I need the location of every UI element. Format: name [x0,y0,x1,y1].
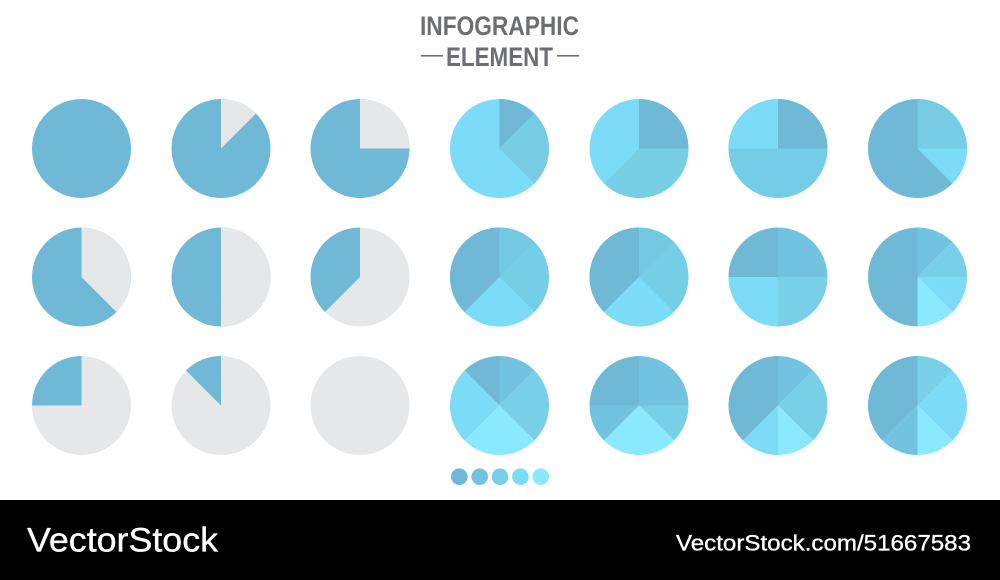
pie: row 3 column 6 [729,356,827,455]
colour legend dots [451,468,549,485]
pie: row 1 column 4 [450,99,549,198]
pie: row 2 column 1 [32,228,131,326]
pie: row 3 column 5 [590,356,688,455]
pie: row 2 column 3 [310,228,410,326]
pie: row 1 column 1, full [32,99,131,198]
footer bar: VectorStock.com/51667583 [676,531,971,556]
pie: row 2 column 2 [172,228,270,326]
pie: row 3 column 4 [450,356,549,455]
title: ELEMENT [446,42,553,72]
pie: row 3 column 2 [172,356,270,455]
title [420,11,579,72]
pie: row 2 column 4 [450,228,549,326]
pie: row 1 column 3 [310,99,410,198]
pie: row 2 column 6 [728,228,828,326]
pie: row 1 column 5 [590,99,688,198]
pie: row 3 column 3, empty [310,356,410,455]
pie: row 2 column 7 [868,228,967,326]
footer bar: VectorStock [27,521,219,559]
pie: row 1 column 2 [172,99,270,198]
pie: row 2 column 5 [590,228,688,326]
title: INFOGRAPHIC [420,11,579,41]
pie: row 3 column 7 [868,356,967,455]
pie: row 1 column 7 [868,99,967,198]
pie: row 3 column 1 [32,356,131,455]
footer bar [0,500,1000,580]
pie: row 1 column 6 [728,99,828,198]
